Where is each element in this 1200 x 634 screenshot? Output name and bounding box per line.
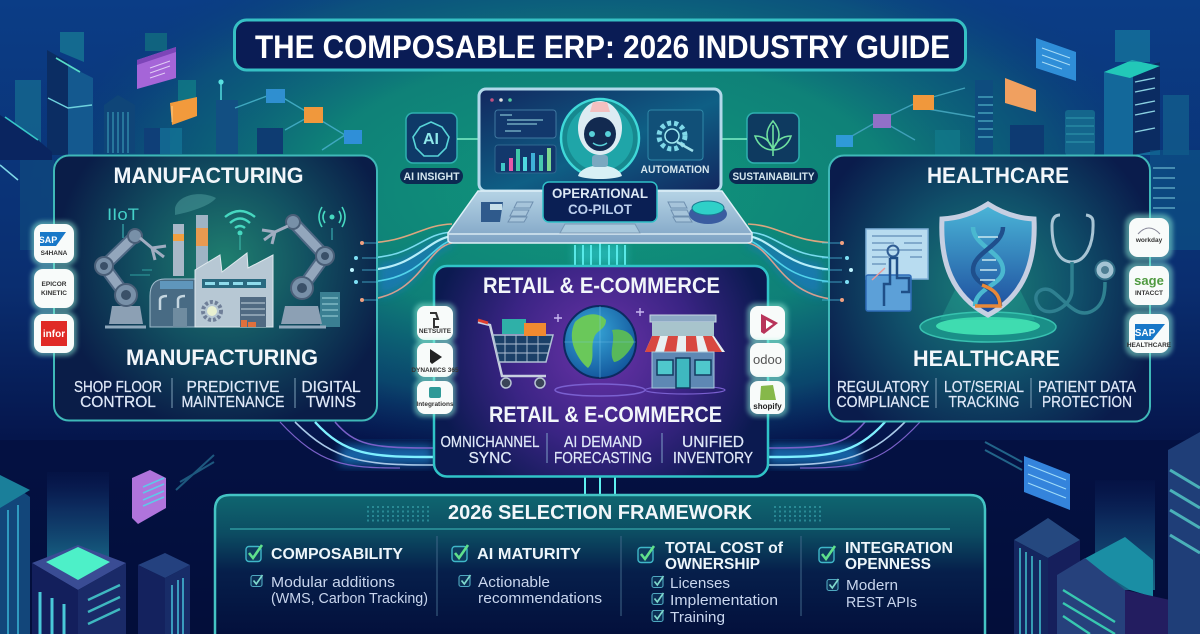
operational co-pilot label: OPERATIONAL	[552, 185, 648, 201]
icon: globe	[554, 306, 645, 396]
panel: retail and e-commerce	[434, 266, 768, 476]
icon: medical document	[866, 229, 928, 311]
AI insight icon: AI	[423, 131, 439, 148]
vendor logos: retail left	[411, 303, 459, 417]
logo: Integrations: Integrations	[416, 401, 454, 408]
skyline: top left	[0, 32, 283, 160]
column: composability: (WMS, Carbon Tracking)	[271, 590, 428, 607]
logo: Sage Intacct	[1125, 262, 1173, 309]
vendor logos: healthcare	[1125, 214, 1173, 357]
logo: Dynamics	[747, 303, 788, 343]
label: omnichannel sync: OMNICHANNEL	[440, 434, 540, 451]
icon: shopping cart	[478, 319, 553, 388]
logo: SAP Healthcare	[1125, 310, 1173, 357]
logo: Shopify: shopify	[753, 402, 782, 411]
label: digital twins: DIGITAL	[301, 379, 361, 396]
hologram platform	[920, 270, 1056, 342]
laptop: operational co-pilot	[448, 89, 752, 243]
sustainability icon: SUSTAINABILITY	[732, 171, 815, 183]
column: integration openness: REST APIs	[846, 594, 917, 611]
label: patient data protection: PROTECTION	[1042, 394, 1132, 411]
label: predictive maintenance: MAINTENANCE	[182, 394, 284, 411]
logo: Sage Intacct: INTACCT	[1135, 290, 1163, 297]
network nodes left	[235, 89, 362, 150]
heading: manufacturing bottom: MANUFACTURING	[126, 345, 318, 370]
panel: healthcare	[822, 156, 1150, 422]
heading: retail bottom: RETAIL & E-COMMERCE	[489, 402, 722, 427]
icon: stethoscope	[1036, 215, 1114, 313]
side city left mid	[0, 160, 54, 250]
logo: Sage Intacct: sage	[1134, 273, 1164, 288]
floating card: orange	[170, 97, 197, 125]
label: unified inventory: UNIFIED	[682, 434, 744, 451]
floating card: blue	[1036, 38, 1076, 81]
logo: SAP S/4HANA: S4HANA	[41, 250, 68, 257]
heading: healthcare top: HEALTHCARE	[927, 163, 1069, 188]
label: regulatory compliance: COMPLIANCE	[836, 394, 930, 411]
heading: framework	[368, 502, 820, 524]
column: integration openness: Modern	[846, 577, 898, 594]
label: shop floor control: CONTROL	[80, 394, 156, 411]
operational co-pilot label	[543, 182, 657, 222]
column: total cost of ownership: Implementation	[670, 592, 778, 609]
heading: manufacturing top: MANUFACTURING	[114, 163, 304, 188]
operational co-pilot label: CO-PILOT	[568, 201, 632, 217]
heading: healthcare bottom: HEALTHCARE	[913, 346, 1060, 371]
logo: SAP Healthcare: SAP	[1135, 328, 1156, 339]
column: integration openness	[819, 540, 953, 611]
city bottom right	[985, 432, 1200, 634]
column: composability: COMPOSABILITY	[271, 546, 403, 563]
factory illustration: IIoT	[107, 205, 139, 224]
vendor logos: retail right	[747, 303, 788, 417]
label: digital twins: TWINS	[306, 394, 356, 411]
column: total cost of ownership: Licenses	[670, 575, 730, 592]
logo: Workday: workday	[1135, 237, 1163, 244]
heading: framework: 2026 SELECTION FRAMEWORK	[448, 502, 753, 524]
robot avatar	[561, 99, 639, 179]
column: AI maturity	[452, 545, 602, 607]
skyline: top right	[935, 30, 1189, 155]
icon: DNA shield	[942, 204, 1034, 315]
label: lot/serial tracking: TRACKING	[948, 394, 1020, 411]
label: shop floor control: SHOP FLOOR	[74, 379, 162, 396]
column: composability	[246, 545, 428, 607]
logo: SAP Healthcare: HEALTHCARE	[1127, 342, 1172, 349]
logo: NetSuite: NETSUITE	[419, 328, 452, 335]
label: regulatory compliance: REGULATORY	[837, 379, 929, 396]
column: composability: Modular additions	[271, 574, 395, 591]
heading: retail top: RETAIL & E-COMMERCE	[483, 273, 720, 298]
logo: SAP S/4HANA	[31, 221, 77, 266]
floating card: purple	[137, 47, 176, 89]
column: total cost of ownership: OWNERSHIP	[665, 556, 760, 573]
column: integration openness: OPENNESS	[845, 556, 931, 573]
network nodes right	[836, 88, 975, 147]
panel: 2026 selection framework	[215, 495, 985, 634]
panel: manufacturing	[54, 156, 378, 420]
column: AI maturity: recommendations	[478, 590, 602, 607]
logo: Odoo: odoo	[753, 352, 782, 367]
icon: storefront	[645, 315, 725, 394]
label: AI demand forecasting: FORECASTING	[554, 450, 652, 467]
logo: Epicor Kinetic: KINETIC	[41, 290, 67, 297]
label: patient data protection: PATIENT DATA	[1038, 379, 1137, 396]
logo: Dynamics 365: DYNAMICS 365	[411, 367, 459, 374]
title banner	[234, 20, 966, 70]
label: AI demand forecasting: AI DEMAND	[564, 434, 642, 451]
AI insight icon	[400, 113, 478, 184]
logo: Epicor Kinetic: EPICOR	[42, 281, 67, 288]
column: total cost of ownership: TOTAL COST of	[665, 540, 784, 557]
laptop screen	[479, 89, 721, 191]
logo: Infor: infor	[43, 329, 65, 340]
label: omnichannel sync: SYNC	[468, 450, 512, 467]
column: AI maturity: AI MATURITY	[477, 546, 581, 563]
panel-edge connector dots	[822, 241, 853, 302]
column: integration openness: INTEGRATION	[845, 540, 953, 557]
sustainability icon	[722, 113, 818, 184]
side city right mid	[1150, 150, 1200, 250]
column: total cost of ownership: Training	[670, 609, 725, 626]
title: THE COMPOSABLE ERP: 2026 INDUSTRY GUIDE	[255, 29, 950, 65]
circuit lines	[280, 224, 920, 494]
laptop screen: AUTOMATION	[640, 164, 710, 176]
city bottom left	[0, 455, 214, 634]
label: unified inventory: INVENTORY	[673, 450, 753, 467]
factory illustration	[95, 194, 378, 327]
floating card: orange right	[1005, 78, 1036, 112]
column: AI maturity: Actionable	[478, 574, 550, 591]
AI insight icon: AI INSIGHT	[404, 171, 460, 183]
label: lot/serial tracking: LOT/SERIAL	[944, 379, 1024, 396]
logo: SAP S/4HANA: SAP	[39, 235, 57, 245]
logo: Epicor Kinetic	[31, 266, 77, 311]
column: total cost of ownership	[638, 540, 784, 626]
logo: Workday	[1125, 214, 1173, 261]
label: predictive maintenance: PREDICTIVE	[186, 379, 280, 396]
laptop keyboard base	[448, 191, 752, 243]
vendor logos: manufacturing	[31, 221, 77, 356]
